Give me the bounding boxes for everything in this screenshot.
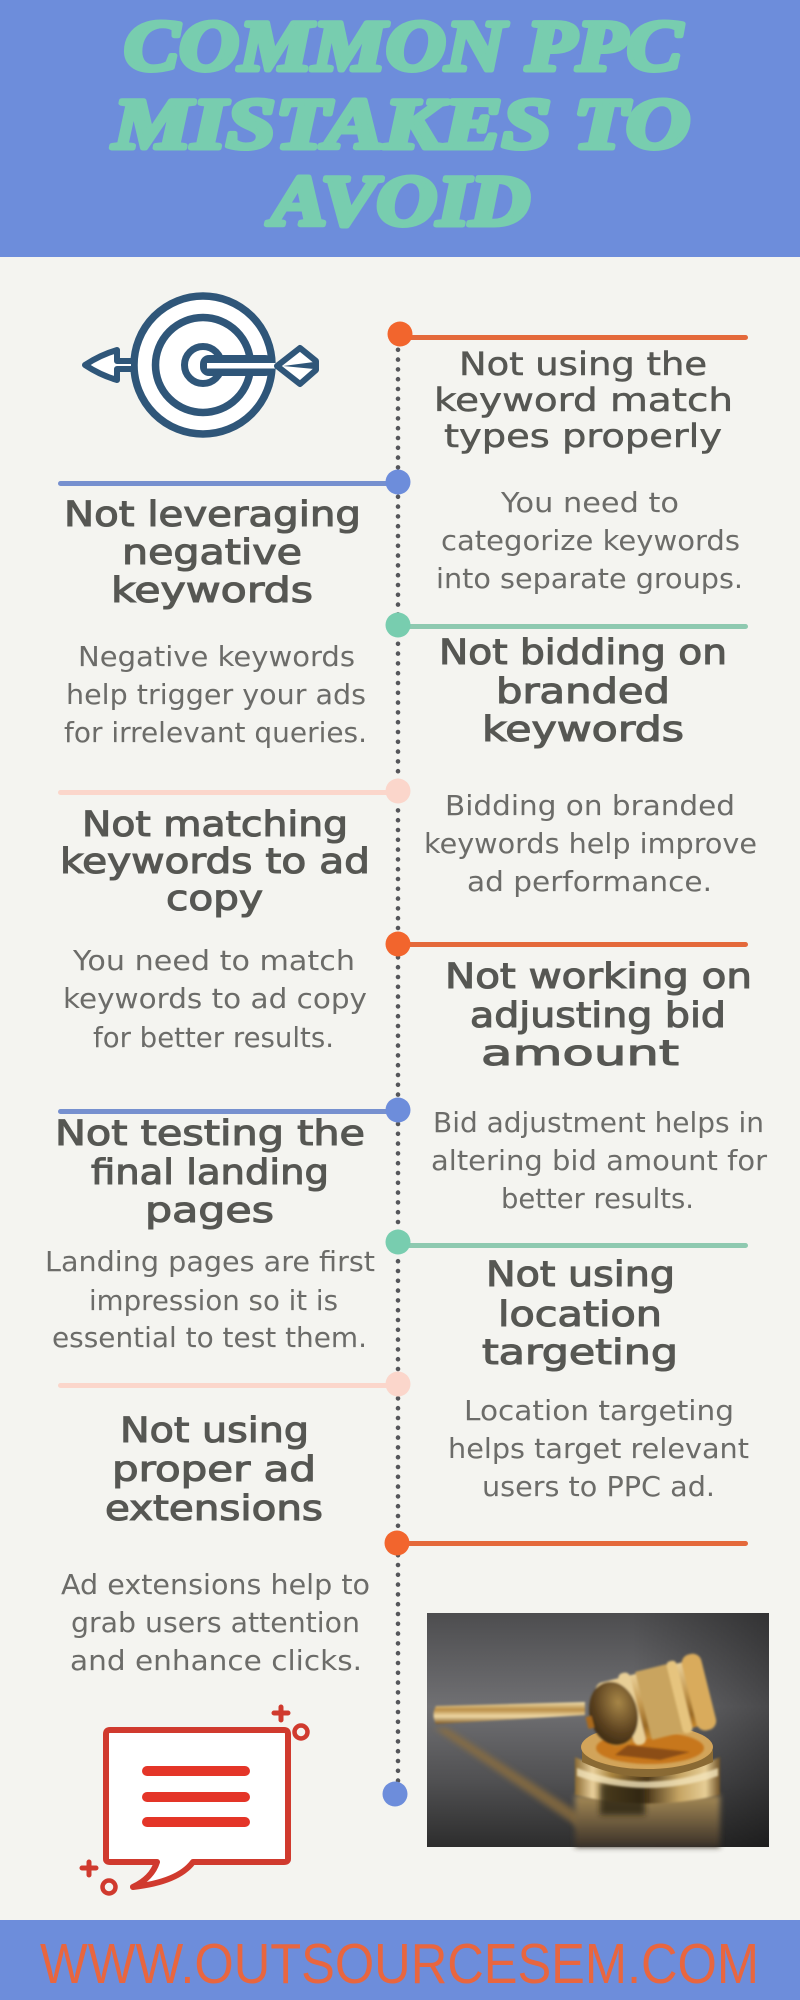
photo: golden gavel: [427, 1613, 769, 1847]
heading: Not using the: [459, 345, 707, 383]
body text: for better results.: [93, 1021, 334, 1054]
body text: better results.: [501, 1182, 694, 1215]
marker: green: [386, 1230, 748, 1254]
body text: [61, 1568, 370, 1677]
body text: help trigger your ads: [66, 678, 366, 711]
body text: grab users attention: [71, 1606, 360, 1639]
heading: copy: [166, 879, 263, 919]
body text: users to PPC ad.: [482, 1470, 715, 1503]
body text: [63, 944, 367, 1054]
item: ad extensions: [58, 1372, 410, 1677]
item: keyword match types: [388, 322, 748, 595]
heading: pages: [145, 1191, 274, 1231]
body text: Negative keywords: [78, 640, 355, 673]
heading: [439, 633, 727, 750]
heading: amount: [481, 1034, 679, 1074]
body text: Bid adjustment helps in: [433, 1106, 764, 1139]
heading: Not using: [120, 1411, 309, 1451]
body text: [448, 1394, 749, 1503]
gavel handle: [434, 1702, 585, 1724]
heading: [445, 957, 752, 1074]
marker: peach: [58, 1372, 410, 1396]
marker: green: [386, 612, 748, 638]
heading: keywords: [482, 710, 684, 750]
item: testing landing pages: [45, 1098, 410, 1354]
body text: into separate groups.: [436, 562, 743, 595]
body text: categorize keywords: [441, 524, 740, 557]
heading: [55, 1114, 365, 1231]
timeline dotted line: [396, 340, 400, 1790]
body text: keywords to ad copy: [63, 982, 367, 1015]
bubble lines: [142, 1766, 250, 1827]
heading: proper ad: [112, 1450, 316, 1490]
marker: peach: [58, 778, 410, 804]
heading: [434, 345, 733, 455]
heading: negative: [122, 533, 302, 573]
header banner: [0, 0, 800, 257]
item: keywords to ad copy: [58, 778, 410, 1054]
marker: blue: [58, 1098, 410, 1122]
body text: Ad extensions help to: [61, 1568, 370, 1601]
sparkles: [82, 1707, 308, 1894]
body text: keywords help improve: [424, 827, 757, 860]
heading: Not matching: [82, 805, 348, 845]
heading: Not testing the: [55, 1114, 365, 1154]
heading: branded: [496, 672, 670, 712]
icon: speech bubble: [82, 1707, 308, 1894]
heading: Not bidding on: [439, 633, 727, 673]
marker: orange: [388, 322, 748, 346]
heading: types properly: [444, 417, 722, 455]
body text: for irrelevant queries.: [64, 716, 367, 749]
heading: [105, 1411, 323, 1529]
heading: targeting: [482, 1333, 678, 1373]
body text: Location targeting: [464, 1394, 734, 1427]
marker: orange: [386, 932, 748, 956]
marker: blue: [58, 470, 410, 494]
item: negative keywords: [58, 470, 410, 749]
marker: orange bottom: [384, 1530, 748, 1556]
body text: [424, 789, 757, 898]
gavel head: [577, 1652, 718, 1758]
body text: Bidding on branded: [445, 789, 735, 822]
icon: target with arrow: [85, 296, 316, 434]
body text: [436, 486, 743, 595]
heading: location: [498, 1295, 662, 1335]
marker: blue end: [382, 1782, 408, 1806]
body text: and enhance clicks.: [70, 1644, 362, 1677]
heading: Not leveraging: [64, 495, 361, 535]
body text: [431, 1106, 768, 1215]
heading: keywords to ad: [60, 842, 370, 882]
title: [112, 6, 690, 241]
heading: [482, 1255, 678, 1373]
heading: Not working on: [445, 957, 752, 997]
body text: You need to: [500, 486, 679, 519]
heading: keywords: [111, 571, 313, 611]
heading: adjusting bid: [470, 996, 726, 1036]
heading: Not using: [486, 1255, 675, 1295]
body text: essential to test them.: [52, 1321, 367, 1354]
footer banner: [0, 1920, 800, 2000]
body text: [45, 1245, 375, 1354]
body text: ad performance.: [467, 865, 712, 898]
heading: keyword match: [434, 381, 733, 419]
body text: altering bid amount for: [431, 1144, 768, 1177]
gavel base: [575, 1725, 720, 1847]
body text: [64, 640, 367, 749]
item: location targeting: [386, 1230, 749, 1503]
title: AVOID: [266, 161, 530, 241]
body text: You need to match: [72, 944, 355, 977]
title: COMMON PPC: [124, 6, 683, 86]
body text: helps target relevant: [448, 1432, 749, 1465]
handle reflection: [434, 1728, 590, 1835]
title: MISTAKES TO: [112, 84, 690, 164]
item: adjusting bid amount: [386, 932, 768, 1215]
body text: impression so it is: [89, 1284, 338, 1317]
heading: final landing: [91, 1153, 329, 1193]
heading: [64, 495, 361, 611]
item: branded keywords: [386, 612, 757, 898]
heading: extensions: [105, 1489, 323, 1529]
body text: Landing pages are first: [45, 1245, 375, 1278]
heading: [60, 805, 370, 919]
